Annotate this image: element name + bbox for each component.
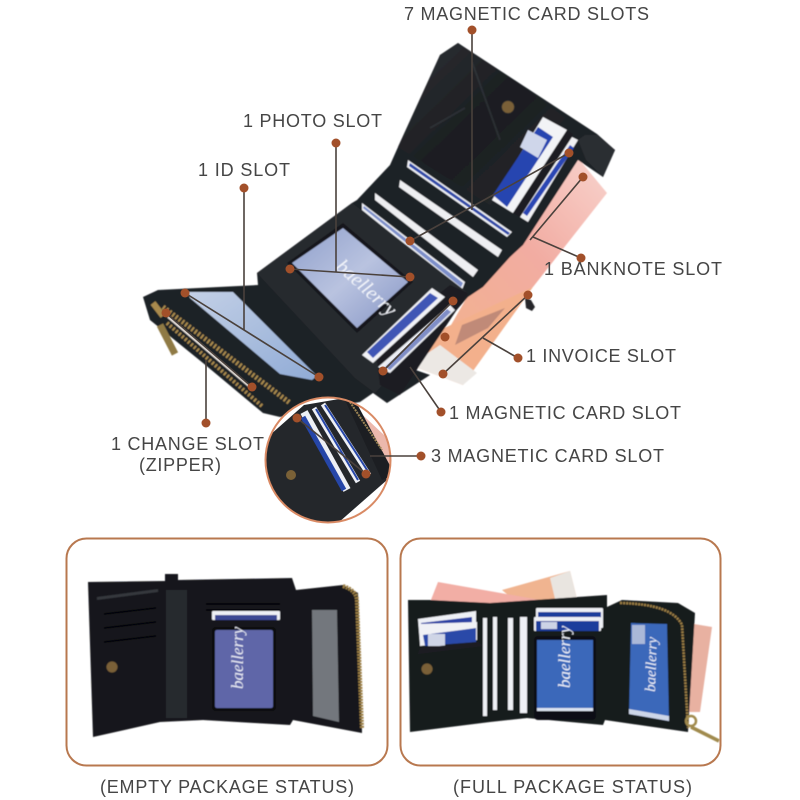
snap button — [502, 100, 514, 114]
empty wallet photo — [88, 574, 362, 737]
ID window — [188, 292, 317, 380]
left cards — [418, 611, 483, 654]
label: 1 banknote slot: 1 BANKNOTE SLOT — [544, 259, 722, 279]
zipper — [153, 303, 290, 407]
brand text center: baellerry — [555, 625, 574, 688]
snap — [106, 662, 118, 672]
label: 1 photo slot: 1 PHOTO SLOT — [243, 111, 382, 131]
brand text: baellerry — [228, 626, 247, 689]
inset snap — [286, 470, 296, 480]
panel: empty package status — [66, 538, 388, 766]
back strip of wallet — [578, 135, 615, 177]
stitched card lines — [104, 604, 280, 642]
four slotted cards — [362, 160, 512, 290]
leader dots — [162, 26, 588, 478]
label: 1 magnetic card slot: 1 MAGNETIC CARD SLOT — [449, 403, 681, 423]
label: 3 magnetic card slot: 3 MAGNETIC CARD SLOT — [431, 446, 664, 466]
right cards — [534, 608, 603, 631]
banknotes — [410, 158, 607, 385]
top cards — [492, 117, 578, 222]
label: 1 invoice slot: 1 INVOICE SLOT — [526, 346, 676, 366]
wallet silhouette — [408, 595, 695, 732]
main open wallet photo — [143, 43, 615, 417]
zipper — [343, 586, 362, 728]
snap — [422, 664, 432, 674]
label: 7 magnetic card slots: 7 MAGNETIC CARD SLOTS — [404, 4, 649, 24]
photo window — [534, 636, 596, 720]
top flap with snap — [398, 43, 565, 205]
label: zipper: (ZIPPER) — [139, 455, 221, 475]
caption: empty package status: (EMPTY PACKAGE STATUS) — [100, 777, 354, 797]
brand on window: baellerry — [332, 255, 401, 321]
zipper pull — [691, 727, 719, 741]
id window — [312, 610, 339, 722]
brand text right: baellerry — [643, 636, 661, 692]
lower pocket cards — [362, 285, 468, 395]
leader lines — [166, 30, 583, 474]
wallet silhouette — [143, 43, 615, 417]
panel: full package status — [400, 538, 720, 766]
middle slots — [483, 617, 527, 716]
photo slot panel — [257, 203, 468, 393]
right window — [629, 623, 669, 721]
label: 1 ID slot: 1 ID SLOT — [198, 160, 290, 180]
photo window — [212, 627, 276, 711]
banknotes — [502, 571, 578, 605]
full wallet photo — [408, 571, 719, 741]
inset magnified circle — [264, 396, 392, 524]
label: 1 change slot: 1 CHANGE SLOT — [111, 434, 264, 454]
card — [212, 611, 280, 620]
caption: full package status: (FULL PACKAGE STATUS) — [453, 777, 692, 797]
